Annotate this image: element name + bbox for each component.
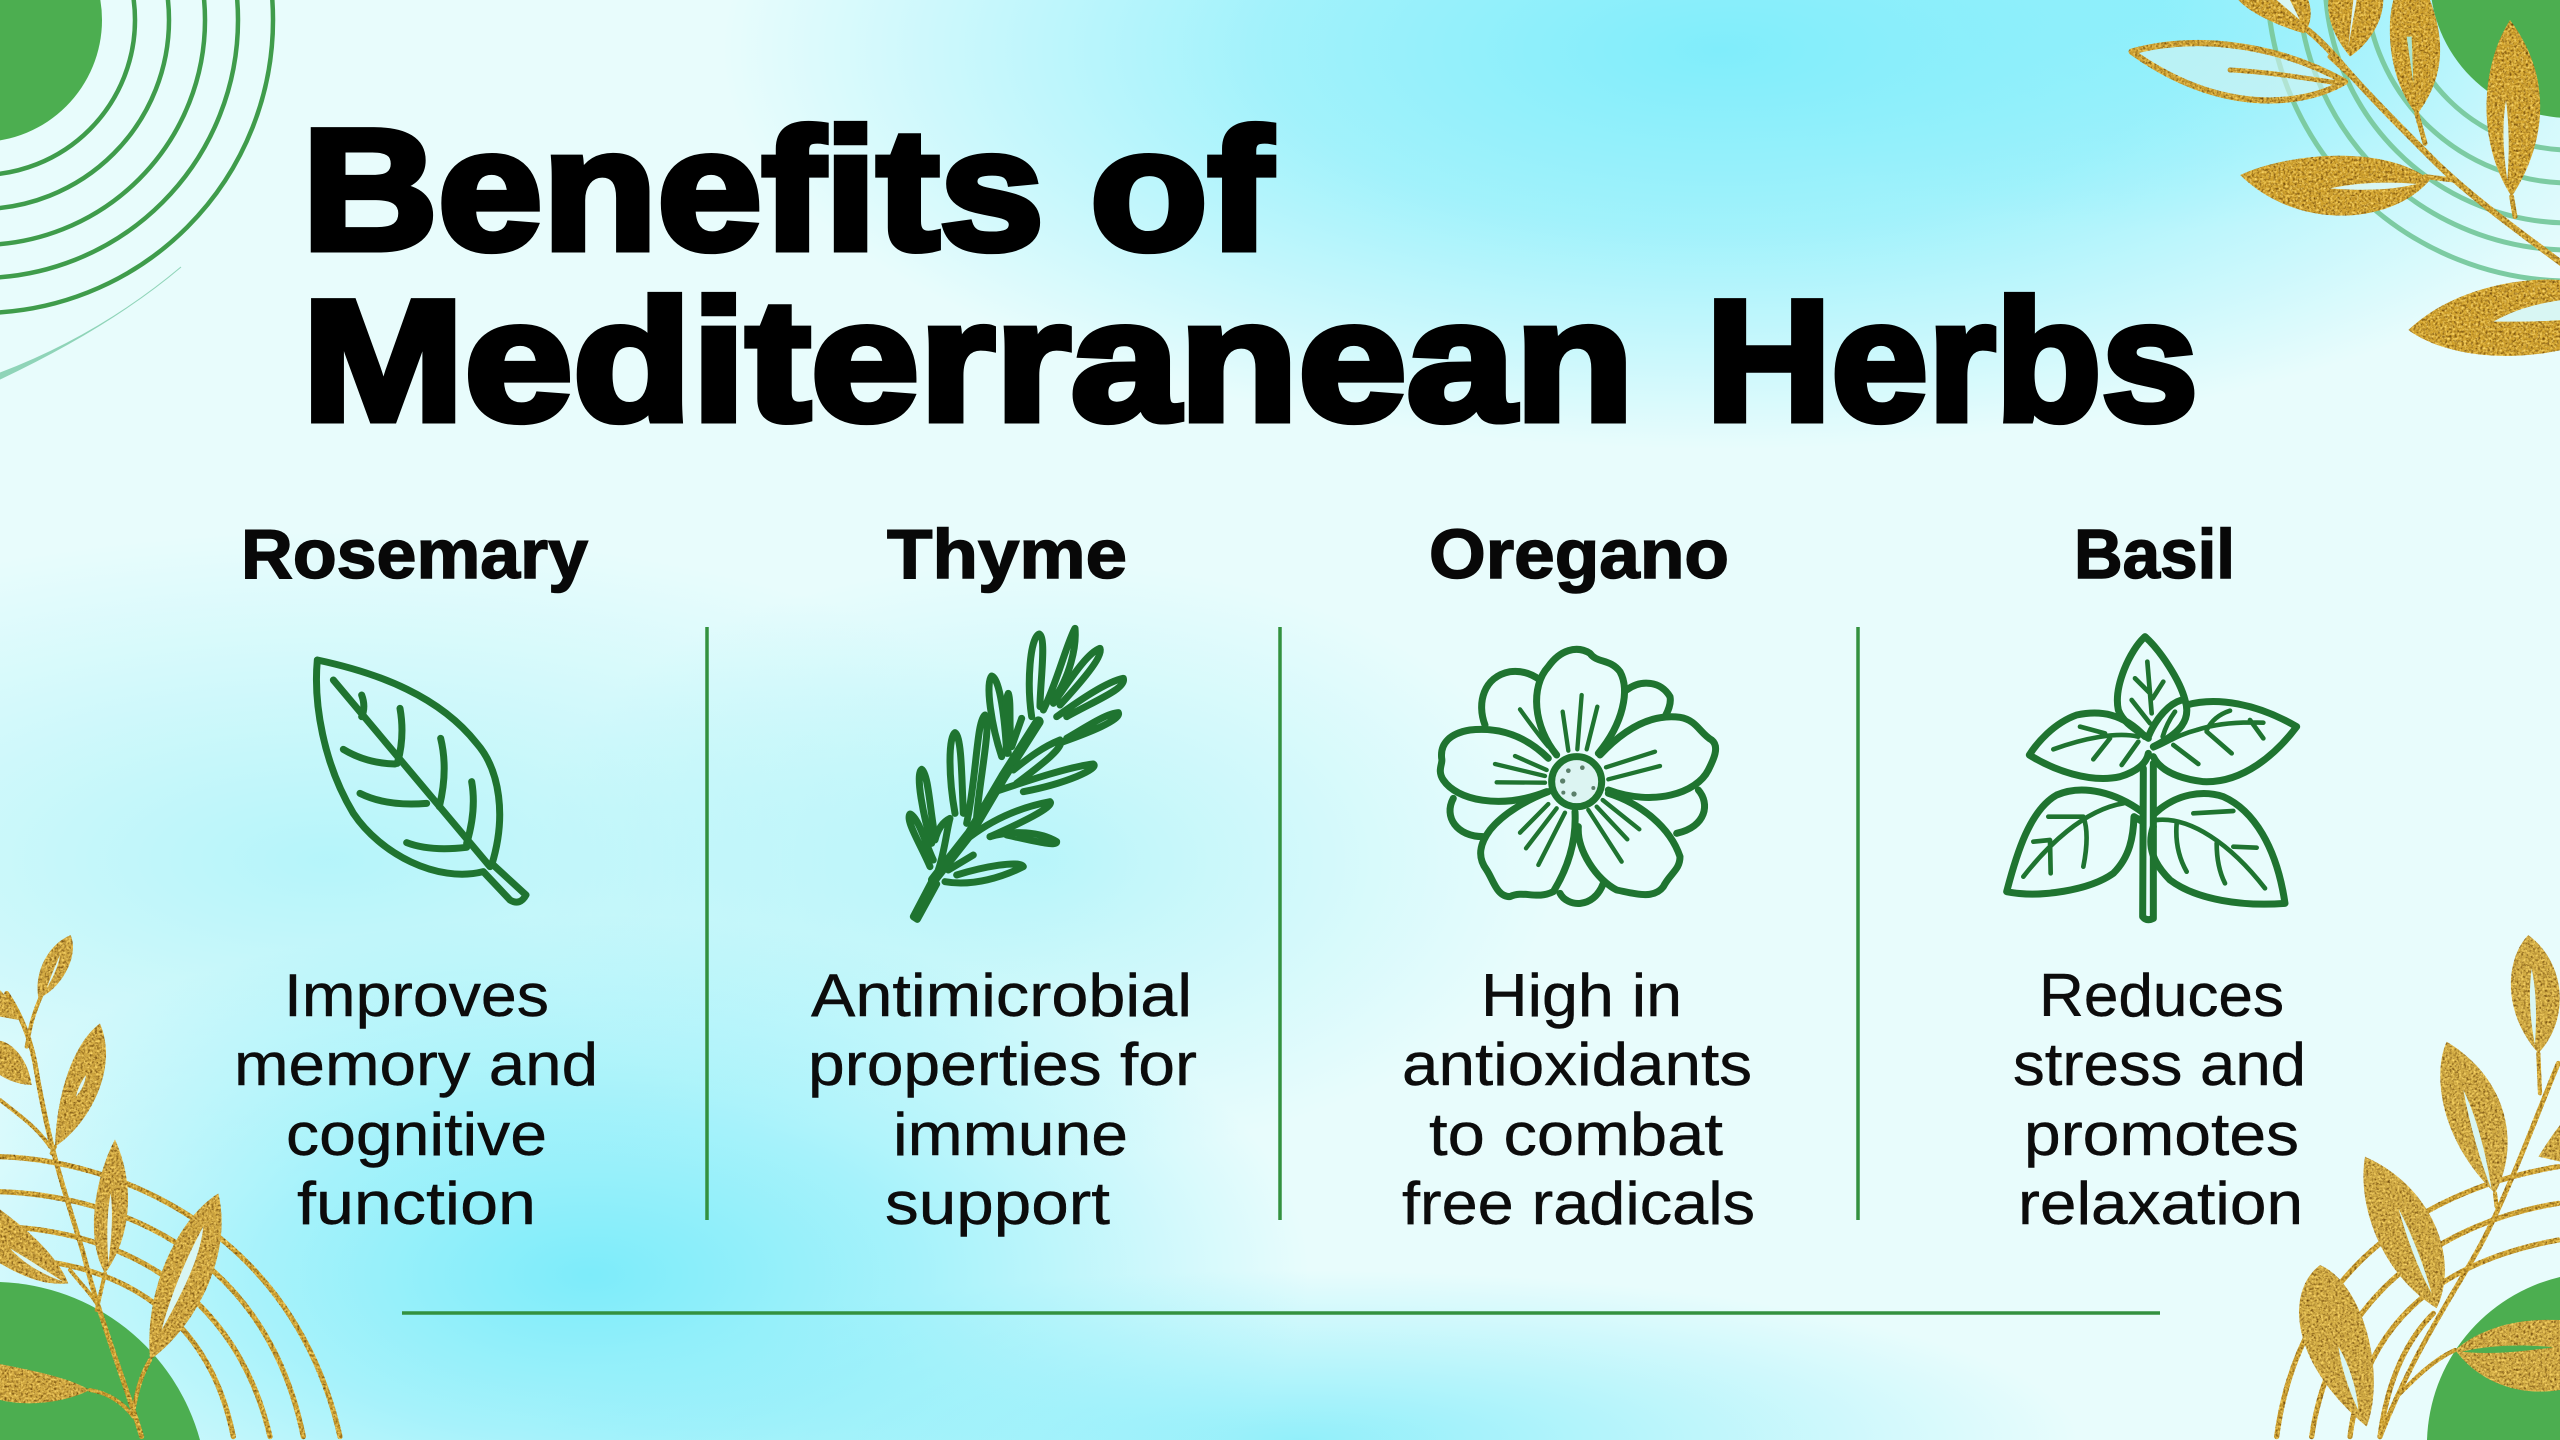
heading: Thyme: Thyme — [887, 515, 1127, 593]
title — [302, 94, 2198, 457]
text: Rosemary benefit: function — [297, 1170, 536, 1237]
icon: basil plant (Basil) — [2007, 637, 2297, 920]
heading: Oregano: Oregano — [1429, 515, 1729, 593]
decoration: bottom-right circle, gold rings and branch — [2277, 935, 2560, 1440]
text: Rosemary benefit: memory and — [234, 1031, 598, 1098]
text: Basil benefit — [2013, 962, 2306, 1237]
text: Rosemary benefit: cognitive — [286, 1101, 547, 1168]
icon: herb sprig (Thyme) — [909, 628, 1124, 919]
text: Oregano benefit — [1402, 962, 1755, 1237]
title: Benefits — [302, 94, 1044, 286]
text: Oregano benefit: antioxidants — [1402, 1031, 1752, 1098]
text: Basil benefit: Reduces — [2039, 962, 2284, 1029]
text: Oregano benefit: to combat — [1429, 1101, 1723, 1168]
text: Basil benefit: stress and — [2013, 1031, 2306, 1098]
title: of — [1090, 94, 1273, 286]
title: Mediterranean — [302, 265, 1634, 457]
icon: flower (Oregano) — [1440, 649, 1716, 903]
heading: Rosemary: Rosemary — [241, 515, 588, 593]
title: Herbs — [1706, 265, 2198, 457]
text: Thyme benefit: support — [885, 1170, 1110, 1237]
text: Thyme benefit — [808, 962, 1197, 1237]
text: Thyme benefit: immune — [893, 1101, 1128, 1168]
icon: leaf (Rosemary) — [316, 660, 526, 902]
decoration: bottom-left circle, gold rings and branch — [0, 935, 340, 1440]
text: Basil benefit: promotes — [2024, 1101, 2299, 1168]
heading: Basil: Basil — [2074, 515, 2235, 593]
text: Rosemary benefit: Improves — [284, 962, 549, 1029]
text: Basil benefit: relaxation — [2018, 1170, 2303, 1237]
text: Oregano benefit: free radicals — [1402, 1170, 1755, 1237]
decoration: top-left circle and rings — [0, 0, 273, 379]
text: Thyme benefit: Antimicrobial — [811, 962, 1192, 1029]
text: Thyme benefit: properties for — [808, 1031, 1197, 1098]
text: Rosemary benefit — [234, 962, 598, 1237]
text: Oregano benefit: High in — [1481, 962, 1682, 1029]
decoration: top-right circle, rings and gold branch — [2132, 0, 2560, 356]
